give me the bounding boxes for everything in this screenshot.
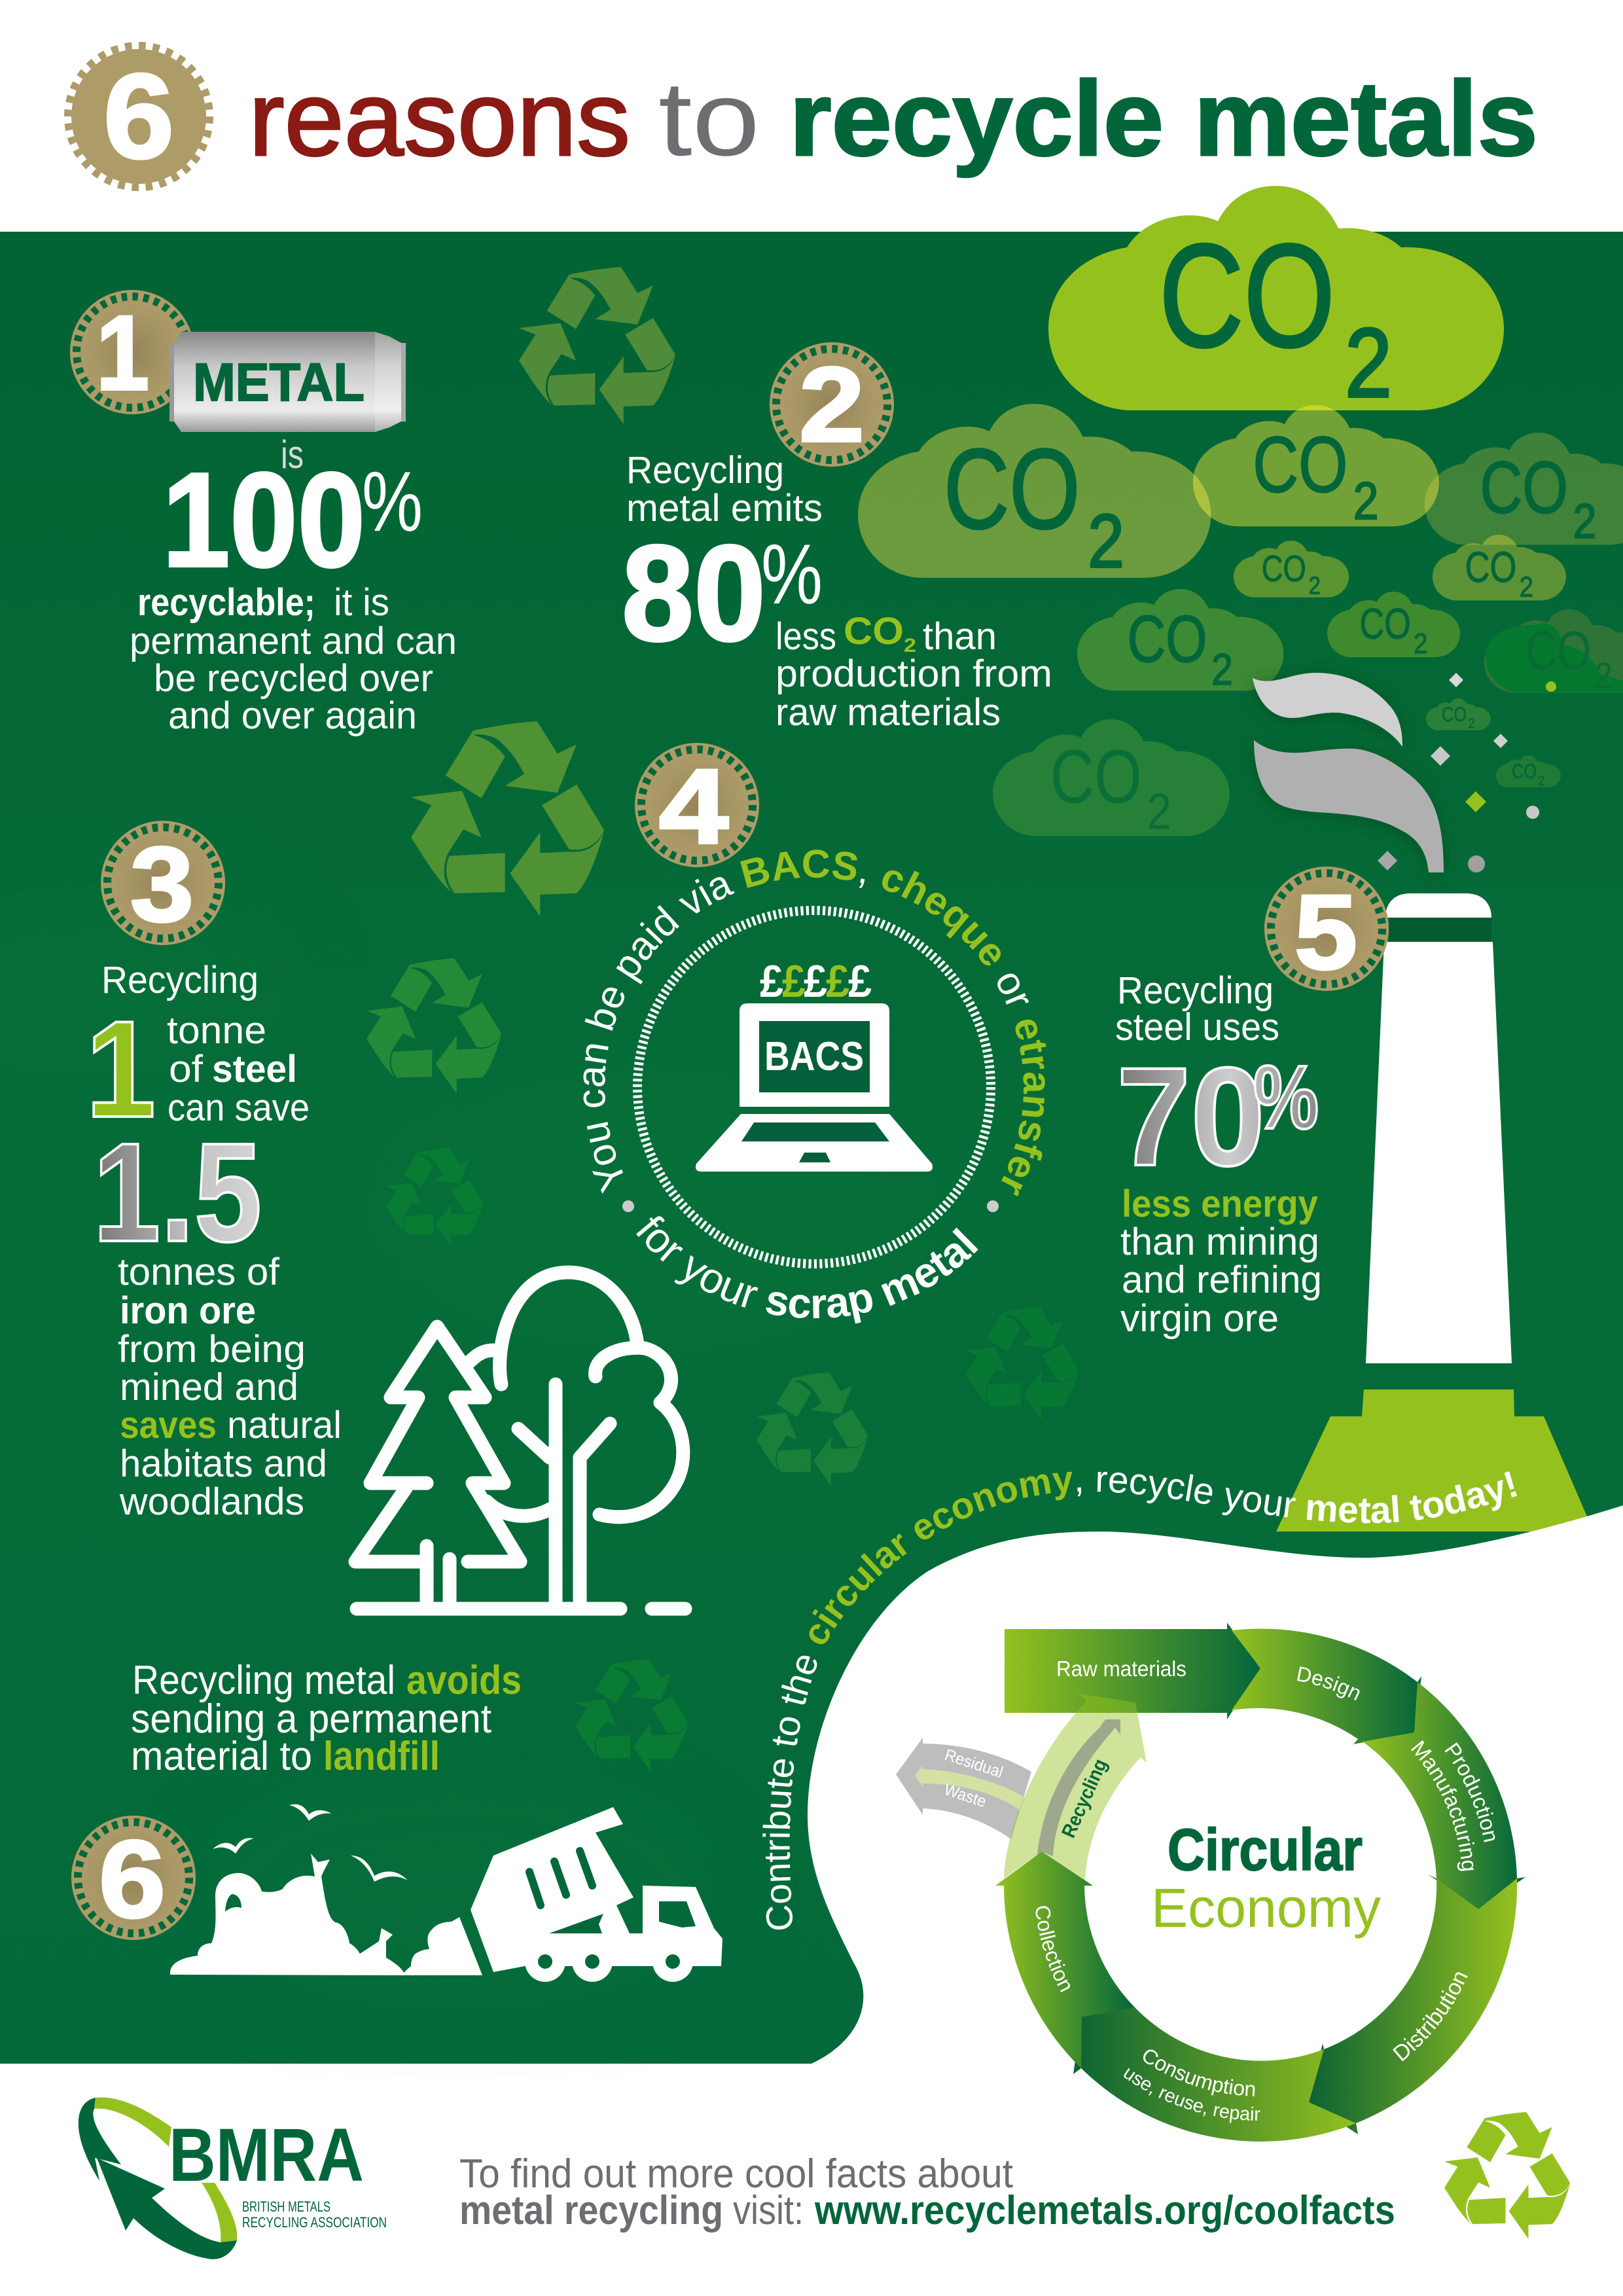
cloud: large CO2 — [1048, 186, 1504, 418]
text: less co2 than: less — [776, 615, 836, 658]
text: recycling 1 tonne of steel can save: 1 — [86, 992, 156, 1146]
text: for your scrap metal: for your scrap metal — [636, 1216, 978, 1323]
arrow: consumption: use, reuse, repair — [1124, 2068, 1260, 2123]
text: tonnes of iron ore: saves — [120, 1404, 217, 1446]
logo: BMRA: RECYCLING ASSOCIATION — [242, 2214, 387, 2231]
text: tonnes of iron ore: tonnes of — [118, 1251, 280, 1293]
cloud: tiny CO2 second: 2 — [1538, 773, 1545, 789]
cloud: mid CO2 lower — [1077, 589, 1283, 694]
panel: reason 2 — [622, 342, 1052, 734]
icon: badge 2: 2 — [799, 346, 865, 464]
cloud: medium CO2 centre — [1193, 405, 1439, 531]
arrow: design — [1232, 1628, 1421, 1744]
arrow: distribution — [1309, 1878, 1517, 2134]
icon: laptop: BACS — [764, 1034, 864, 1079]
arrow: distribution: Distribution — [1393, 1973, 1468, 2062]
cloud: medium CO2 right: 2 — [1573, 493, 1597, 548]
text: recycling 1 tonne of steel can save: of — [169, 1048, 204, 1090]
icon: metal can — [169, 332, 406, 432]
icon: birds — [213, 1804, 408, 1882]
cloud: tiny CO2 second — [1496, 755, 1561, 789]
icon: pound signs: £ — [826, 956, 849, 1007]
text: recycling 1 tonne of steel can save — [86, 959, 310, 1146]
title: to — [658, 60, 760, 178]
chart: circular economy diagram — [896, 1623, 1550, 2164]
icon: recycling symbol footer — [1444, 2112, 1570, 2239]
cloud: mid CO2 lower: 2 — [1211, 645, 1233, 694]
arrow: residual waste — [896, 1738, 1031, 1839]
text: less co2 than — [776, 610, 1052, 734]
title: reasons — [249, 60, 630, 178]
cloud: small CO2: CO — [1262, 548, 1306, 590]
text: footer call to action: www.recyclemetals.org/coolfacts — [814, 2188, 1395, 2233]
text: recyclable description — [130, 581, 457, 737]
panel: green background — [0, 232, 1623, 2064]
panel: reason 1 — [70, 290, 457, 737]
text: tonnes of iron ore: from being — [118, 1328, 306, 1371]
text: recyclable description: be recycled over — [154, 657, 433, 700]
cloud: tiny CO2: CO — [1442, 702, 1467, 726]
icon: pound signs: £ — [804, 956, 827, 1007]
text: footer call to action: metal recycling — [459, 2188, 723, 2233]
icon: pound signs: £ — [782, 956, 806, 1007]
icon: smoke particles — [1378, 673, 1539, 872]
text: avoids landfill: landfill — [323, 1734, 440, 1779]
cloud: small CO2 lower: 2 — [1414, 628, 1427, 660]
cloud: small CO2 right: 2 — [1520, 571, 1533, 603]
cloud: medium CO2 right — [1425, 433, 1623, 548]
text: footer call to action: visit: — [733, 2188, 804, 2233]
text: 70%: % — [1253, 1047, 1319, 1148]
icon: badge 5: 5 — [1294, 873, 1357, 992]
text: footer call to action: To find out more cool facts about — [459, 2151, 1013, 2197]
text: 100%: % — [362, 454, 423, 549]
icon: header gear badge 6: 6 — [103, 48, 174, 183]
text: 1.5: 1.5 — [93, 1113, 262, 1271]
arrow: production manufacturing — [1363, 1682, 1525, 1909]
text: less co2 than: production from — [776, 653, 1052, 695]
icon: badge 1 — [70, 290, 194, 414]
text: avoids landfill: Recycling metal — [132, 1658, 395, 1703]
text: circular economy: Economy — [1151, 1877, 1381, 1939]
arrow: residual waste: Waste — [942, 1780, 989, 1811]
icon: badge 3 — [101, 821, 225, 945]
icon: header gear badge 6 — [68, 46, 209, 187]
icon: trees — [355, 1272, 685, 1609]
arrow: residual waste: Residual — [942, 1746, 1005, 1782]
cloud: small CO2 lower: CO — [1359, 600, 1411, 648]
logo: BMRA: BRITISH METALS — [242, 2198, 330, 2215]
logo: BMRA — [79, 2098, 387, 2259]
icon: dump truck — [471, 1807, 722, 1982]
title — [249, 60, 1538, 178]
text: recycling steel uses — [1115, 969, 1279, 1049]
text: less co2 than: raw materials — [776, 691, 1001, 734]
icon: badge 6 — [71, 1816, 196, 1941]
text: recyclable description: it is — [334, 581, 389, 624]
text: footer call to action — [459, 2151, 1395, 2233]
arrow: production manufacturing: Manufacturing — [1411, 1740, 1475, 1871]
text: less co2 than: 2 — [904, 635, 916, 656]
text: tonnes of iron ore: iron ore — [120, 1289, 256, 1332]
text: avoids landfill: material to — [131, 1734, 312, 1779]
arrow: recycling — [1004, 1694, 1147, 1882]
text: avoids landfill — [131, 1658, 522, 1779]
icon: metal can: METAL — [193, 353, 365, 412]
decorative tick ring — [637, 910, 991, 1264]
text: less energy: than mining — [1120, 1221, 1319, 1263]
cloud: medium CO2 left: 2 — [1088, 499, 1124, 584]
icon: badge 5 — [1264, 867, 1389, 992]
cloud: faded CO2 lower left — [993, 719, 1230, 840]
arrow: design: Design — [1297, 1666, 1360, 1700]
text: 80%: 80 — [622, 518, 766, 670]
cloud: large CO2: 2 — [1345, 308, 1392, 418]
cloud: mid CO2 lower: CO — [1128, 601, 1207, 676]
icon: badge 1: 1 — [96, 294, 149, 412]
cloud: tiny CO2 — [1426, 698, 1491, 732]
cloud: medium CO2 centre: 2 — [1353, 472, 1378, 531]
cloud: medium CO2 left — [858, 404, 1211, 584]
panel: reason 3 — [86, 821, 685, 1609]
arrow: collection: Collection — [1035, 1906, 1070, 1992]
text: circular economy: Circular — [1168, 1818, 1363, 1883]
text: avoids landfill: avoids — [406, 1658, 522, 1703]
cloud: large CO2: CO — [1159, 214, 1335, 378]
text: recycling metal emits — [626, 449, 823, 529]
text: avoids landfill: sending a permanent — [131, 1696, 491, 1742]
cloud: right edge CO2: CO — [1525, 619, 1591, 681]
cloud: faded CO2 lower left: CO — [1050, 734, 1142, 819]
cloud: right edge CO2 — [1484, 609, 1623, 696]
icon: ring dots — [622, 1200, 999, 1212]
text: contribute to the circular economy: Contribute to the circular economy, recycle your metal today! — [762, 1471, 1517, 1929]
text: recyclable description: permanent and can — [130, 620, 457, 662]
text: recycling 1 tonne of steel can save: Recycling — [101, 959, 259, 1001]
white swoosh — [808, 1505, 1623, 2068]
text: is: is — [281, 433, 304, 476]
arrow: production manufacturing: Production — [1445, 1742, 1495, 1842]
cloud: small CO2: 2 — [1309, 572, 1321, 600]
icon: chimney smoke — [1253, 673, 1444, 872]
text: less co2 than: than — [923, 615, 997, 658]
text: tonnes of iron ore: woodlands — [119, 1480, 304, 1523]
cloud: medium CO2 centre: CO — [1253, 420, 1348, 509]
text: recycling steel uses: Recycling — [1117, 969, 1274, 1012]
icon: badge 4 — [635, 743, 759, 867]
cloud: medium CO2 right: CO — [1480, 446, 1568, 529]
panel: reason 4 — [584, 743, 1046, 1323]
text: recycling metal emits: Recycling — [626, 449, 784, 492]
icon: pound signs — [760, 956, 872, 1007]
icon: laptop — [696, 1003, 933, 1172]
cloud: small CO2 lower — [1327, 592, 1460, 660]
icon: chimney — [1276, 893, 1594, 1532]
text: circular economy — [1151, 1818, 1381, 1939]
cloud: small CO2 right — [1433, 535, 1566, 603]
text: less co2 than: CO — [844, 610, 904, 653]
icon: pound signs: £ — [760, 956, 783, 1007]
text: tonnes of iron ore: mined and — [120, 1366, 298, 1408]
text: tonnes of iron ore: natural — [227, 1404, 342, 1446]
arrow: raw materials: Raw materials — [1056, 1657, 1186, 1681]
cloud: faded CO2 lower left: 2 — [1147, 782, 1171, 840]
text: tonnes of iron ore — [118, 1251, 342, 1523]
text: 80%: % — [761, 526, 823, 622]
icon: pound signs: £ — [848, 956, 872, 1007]
text: less energy: less energy — [1122, 1183, 1318, 1225]
icon: badge 3: 3 — [130, 825, 194, 944]
arrow: collection — [995, 1852, 1135, 2068]
text: less energy: and refining — [1122, 1259, 1322, 1301]
arrow: consumption — [1073, 2006, 1356, 2142]
icon: badge 4: 4 — [659, 747, 728, 866]
cloud: small CO2 right: CO — [1465, 543, 1516, 591]
text: recyclable description: recyclable; — [137, 581, 315, 624]
arrow: raw materials — [1005, 1623, 1260, 1719]
text: less energy: virgin ore — [1120, 1297, 1279, 1340]
text: recycling metal emits: metal emits — [626, 487, 823, 529]
icon: badge 6: 6 — [99, 1818, 166, 1941]
text: recycling 1 tonne of steel can save: tonne — [167, 1009, 266, 1052]
icon: recycling symbols in background — [366, 267, 1079, 1772]
logo: BMRA: BMRA — [169, 2113, 364, 2197]
arrow: consumption: Consumption — [1143, 2050, 1255, 2096]
cloud: right edge CO2: 2 — [1595, 655, 1613, 696]
text: 100%: 100 — [162, 445, 365, 595]
cloud: tiny CO2: 2 — [1468, 716, 1475, 732]
icon: landfill pile — [170, 1854, 482, 1975]
text: recycling 1 tonne of steel can save: steel — [212, 1048, 297, 1090]
text: recycling 1 tonne of steel can save: can save — [168, 1086, 310, 1129]
text: recycling steel uses: steel uses — [1115, 1006, 1279, 1049]
cloud: tiny CO2 second: CO — [1512, 759, 1537, 783]
text: you can be paid via bacs cheque or etransfer: You can be paid via BACS, cheque or etransfer — [584, 850, 1046, 1196]
cloud: medium CO2 left: CO — [944, 425, 1080, 552]
arrow: recycling: Recycling — [1058, 1755, 1111, 1841]
title: recycle metals — [789, 60, 1538, 178]
cloud: small CO2 — [1234, 541, 1349, 600]
text: recyclable description: and over again — [168, 694, 417, 737]
panel: reason 6 — [71, 1658, 722, 1982]
icon: badge 2 — [770, 342, 894, 467]
text: 70%: 70 — [1116, 1039, 1265, 1195]
text: less energy — [1120, 1183, 1322, 1340]
panel: reason 5 — [1115, 867, 1389, 1340]
text: tonnes of iron ore: habitats and — [120, 1443, 327, 1485]
